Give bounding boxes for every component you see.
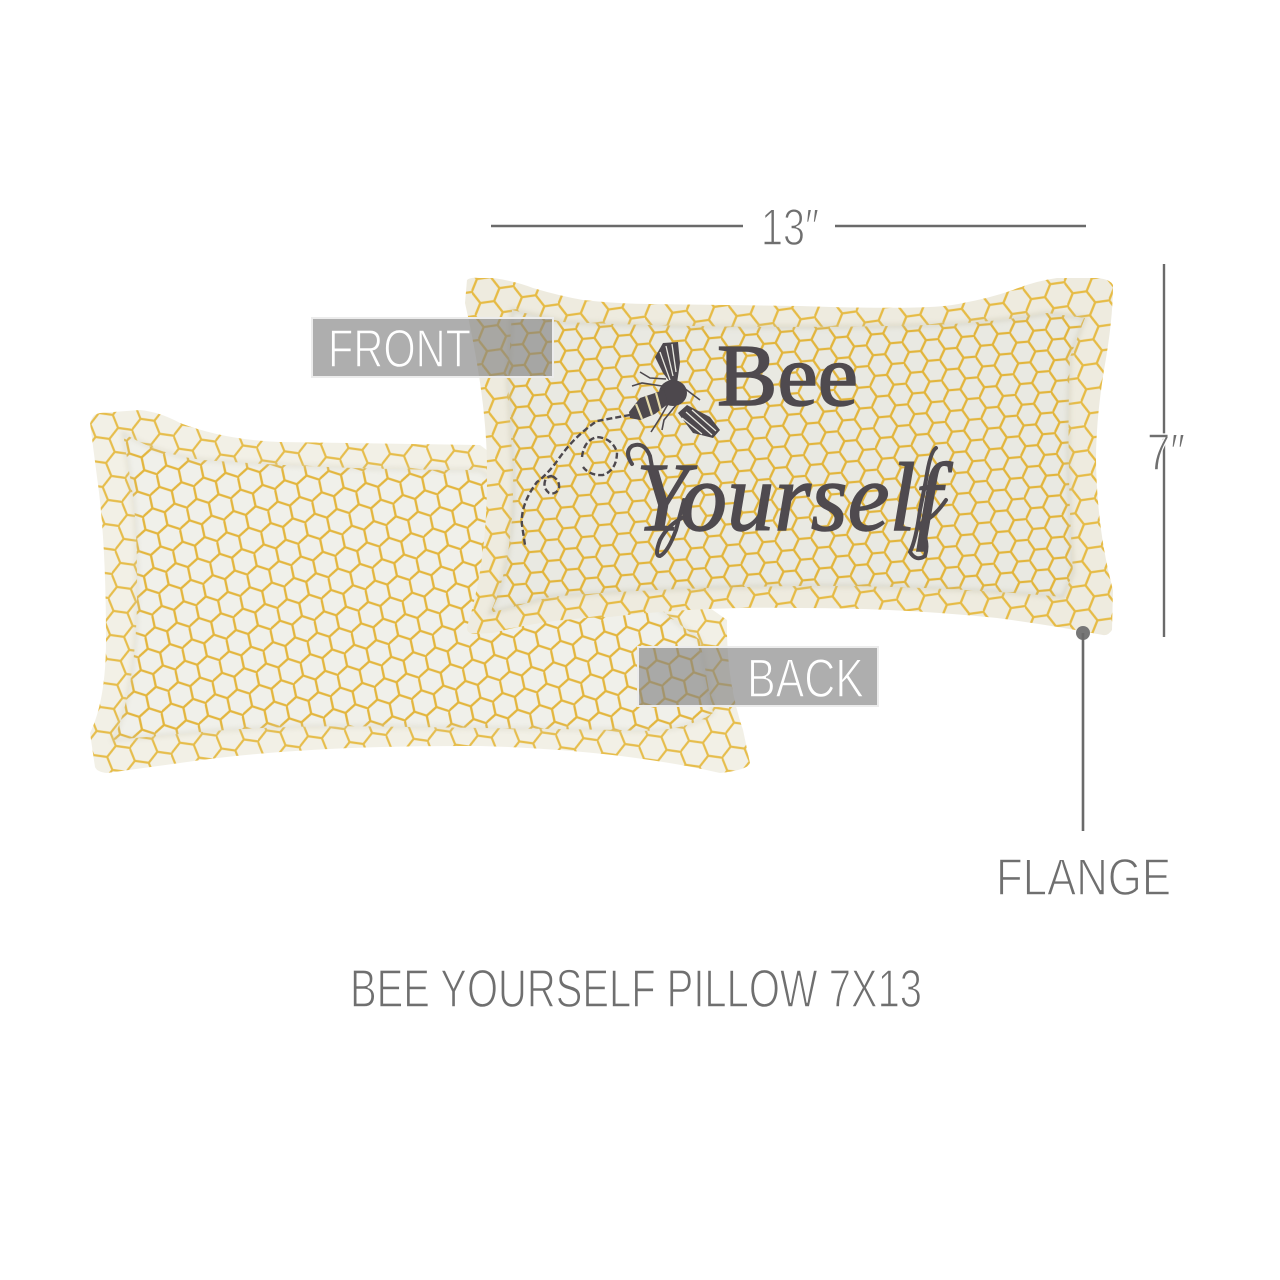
label: FRONT: FRONT xyxy=(328,319,471,379)
flange callout: FLANGE xyxy=(996,849,1171,907)
height dimension: 7 inches: 7″ xyxy=(1147,424,1185,482)
bee thorax xyxy=(659,380,687,406)
bee lower wing xyxy=(678,405,720,438)
bee upper wing xyxy=(655,342,680,390)
front pillow xyxy=(465,278,1113,635)
pillow text: Yourself: Yourself xyxy=(636,444,953,552)
label: BACK: BACK xyxy=(747,647,864,709)
flange callout xyxy=(996,626,1171,907)
pillow text: Bee: Bee xyxy=(717,328,858,425)
bee illustration xyxy=(629,342,720,438)
front pillow flange xyxy=(465,278,1113,635)
width dimension: 13 inches: 13″ xyxy=(761,199,819,257)
bee dashed trail xyxy=(522,415,630,545)
back pillow xyxy=(90,410,750,773)
back pillow flange xyxy=(90,410,750,773)
script swashes xyxy=(628,445,946,558)
front pillow body xyxy=(490,310,1085,613)
back pillow body xyxy=(113,433,713,740)
bee abdomen xyxy=(629,390,668,420)
bee legs xyxy=(632,372,700,432)
label: BACK xyxy=(638,647,878,709)
title: BEE YOURSELF PILLOW 7X13 xyxy=(350,959,922,1019)
